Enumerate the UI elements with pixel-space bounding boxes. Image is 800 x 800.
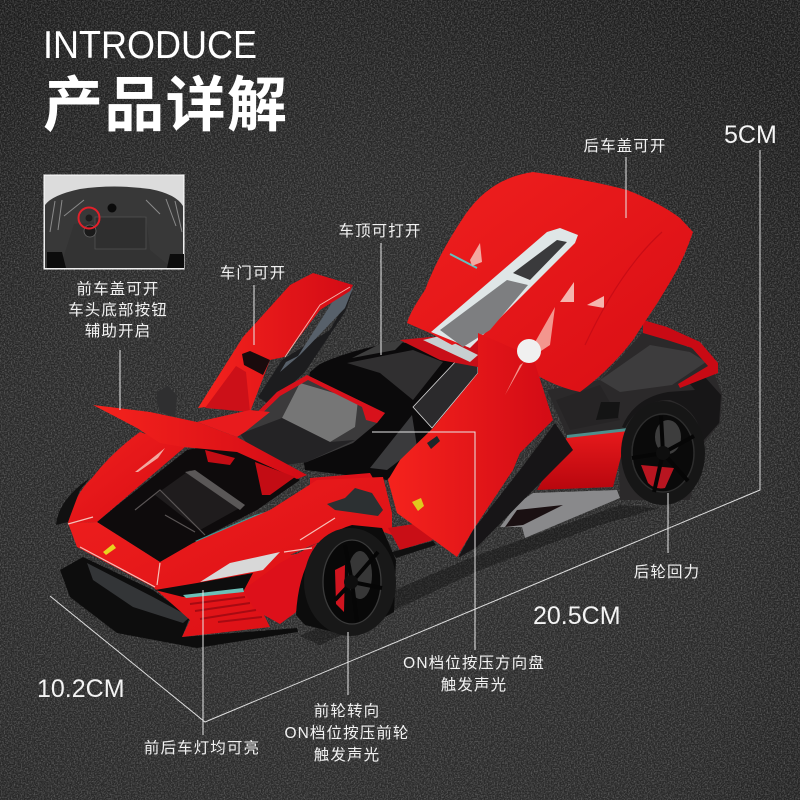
car: front vents <box>190 597 262 622</box>
car: red pieces behind rear hood <box>400 337 478 367</box>
car: carbon grille <box>87 563 190 623</box>
label: steering wheel <box>403 653 545 694</box>
inset photo: bottom button of front hood <box>44 175 184 269</box>
car: inner door black edge <box>458 423 573 558</box>
car: front black splitter <box>60 557 298 648</box>
car: red dash under roof <box>310 473 380 490</box>
car: black roof <box>300 340 478 480</box>
car: front hood open panel <box>93 405 307 479</box>
car: side sill <box>500 490 620 538</box>
car: left front fender <box>68 432 185 523</box>
car: door handle <box>427 436 440 449</box>
heading: 产品详解: 产品详解 <box>43 72 287 139</box>
car: rear wheel <box>621 401 705 505</box>
car: rear side red panel <box>537 430 628 490</box>
car: windscreen <box>237 375 385 470</box>
car: wheel arch and front wheel <box>296 525 396 636</box>
car: black strip and headlight <box>155 573 253 597</box>
label: rear wheel: 后轮回力 <box>634 563 700 581</box>
car: rear spoiler <box>643 320 718 388</box>
car: headlight <box>200 552 280 582</box>
label: front wheel: 前轮转向 <box>314 702 380 720</box>
label: front hood: 辅助开启 <box>85 322 151 340</box>
car: rear black body <box>547 330 722 500</box>
leader lines <box>120 157 668 735</box>
label: lights: 前后车灯均可亮 <box>144 739 260 757</box>
title: INTRODUCE: INTRODUCE <box>43 24 257 67</box>
label: steering wheel: ON档位按压方向盘 <box>403 653 545 672</box>
label: rear hood: 后车盖可开 <box>583 137 667 155</box>
label: front hood: 前车盖可开 <box>76 280 160 298</box>
label: front wheel <box>284 702 410 764</box>
car: badge <box>103 544 116 555</box>
dimension label: 20.5CM: 20.5CM <box>533 602 621 630</box>
dimension label: 10.2CM: 10.2CM <box>37 675 125 703</box>
car: door badge <box>412 498 424 511</box>
car model <box>56 172 722 648</box>
label: roof: 车顶可打开 <box>338 222 422 240</box>
car: opened upper door <box>198 273 353 412</box>
car: hood bay black <box>97 440 300 562</box>
car: wing mirror right <box>327 488 383 516</box>
dimension label: 5CM: 5CM <box>724 121 777 149</box>
label: door: 车门可开 <box>220 264 286 282</box>
car: opened front door <box>388 307 555 557</box>
car: nose and body <box>68 477 392 637</box>
label: steering wheel: 触发声光 <box>441 676 507 694</box>
car: wing mirror left <box>157 386 177 417</box>
label: front hood: 车头底部按钮 <box>68 301 168 319</box>
car: red side panel under door <box>388 523 433 550</box>
car: ground shadow <box>300 505 660 645</box>
label: front wheel: ON档位按压前轮 <box>284 724 410 742</box>
label: front hood <box>68 280 168 340</box>
label: front wheel: 触发声光 <box>314 746 380 764</box>
car: round mirror highlight <box>517 339 541 363</box>
dimension lines <box>50 150 760 722</box>
car: door glass <box>413 340 478 428</box>
car: roof glass strip <box>370 415 417 470</box>
car: big open rear hood <box>407 172 693 392</box>
